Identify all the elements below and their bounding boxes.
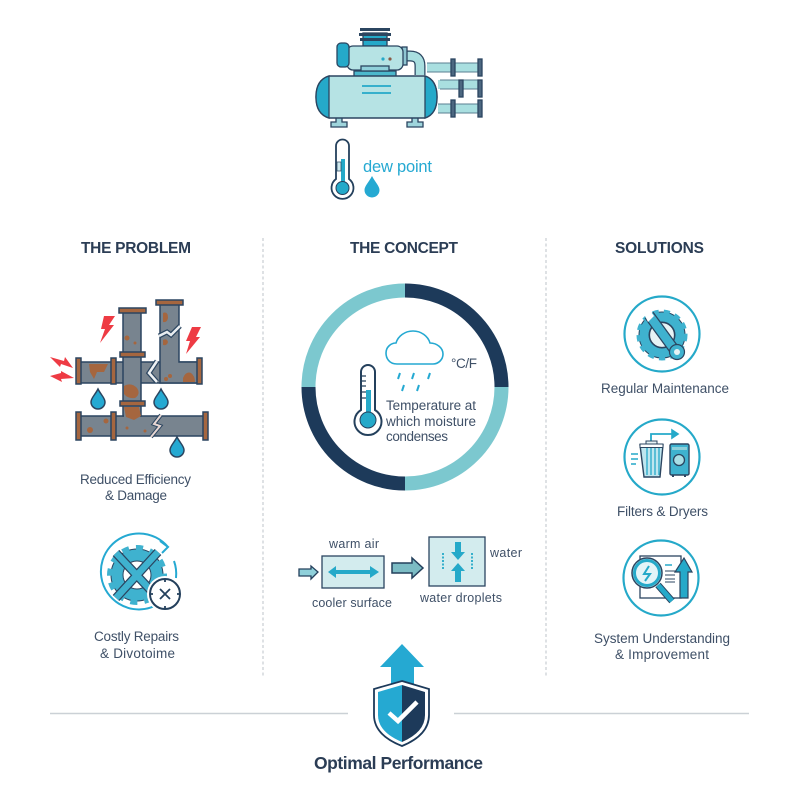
solution icon: regular maintenance <box>624 296 700 372</box>
caption: costly repairs: & Divotoime <box>100 646 175 661</box>
condensation diagram <box>299 537 522 610</box>
small input arrow <box>299 566 318 579</box>
caption: reduced efficiency: & Damage <box>105 488 167 503</box>
solution icon: system understanding <box>624 540 698 616</box>
concept definition text: Temperature at <box>386 398 476 413</box>
icon: water drop <box>364 176 380 198</box>
caption: system understanding <box>594 631 730 662</box>
condensation diagram: water droplets <box>419 591 502 605</box>
heading: the problem: THE PROBLEM <box>81 240 191 257</box>
concept definition text <box>385 398 476 444</box>
concept definition text: condenses <box>386 429 448 444</box>
heading: the concept: THE CONCEPT <box>350 240 459 257</box>
icon: shield with check <box>374 681 429 746</box>
condensation diagram: cooler surface <box>312 596 392 610</box>
arrow: upward improvement <box>380 644 424 692</box>
label: dew point: dew point <box>363 158 432 176</box>
caption: reduced efficiency: Reduced Efficiency <box>80 472 191 487</box>
solution icon: filters and dryers <box>624 420 700 494</box>
caption: system understanding: System Understanding <box>594 631 730 646</box>
condensation diagram: warm air <box>328 537 379 551</box>
label: unit: °C/F <box>451 356 477 371</box>
converging arrows <box>451 542 465 582</box>
icon: costly repairs gear and clock <box>101 533 183 612</box>
icon: damaged rusty pipes <box>50 300 208 457</box>
caption: system understanding: & Improvement <box>615 647 709 662</box>
droplets box <box>429 537 485 586</box>
double arrow <box>328 566 379 578</box>
icon: air compressor <box>316 28 482 127</box>
label: optimal performance: Optimal Performance <box>314 753 483 773</box>
donut ring <box>308 290 502 484</box>
icon: rain cloud <box>386 331 443 391</box>
caption: costly repairs <box>94 629 179 661</box>
caption: filters and dryers: Filters & Dryers <box>617 504 708 519</box>
heading: solutions: SOLUTIONS <box>615 240 704 257</box>
icon: concept thermometer <box>354 365 381 435</box>
caption: costly repairs: Costly Repairs <box>94 629 179 644</box>
large process arrow <box>392 558 423 578</box>
cooler surface box <box>322 556 384 588</box>
concept definition text: which moisture <box>385 414 476 429</box>
caption: regular maintenance: Regular Maintenance <box>601 381 729 396</box>
caption: reduced efficiency <box>80 472 191 503</box>
condensation diagram: water <box>489 546 522 560</box>
icon: thermometer <box>331 140 354 199</box>
